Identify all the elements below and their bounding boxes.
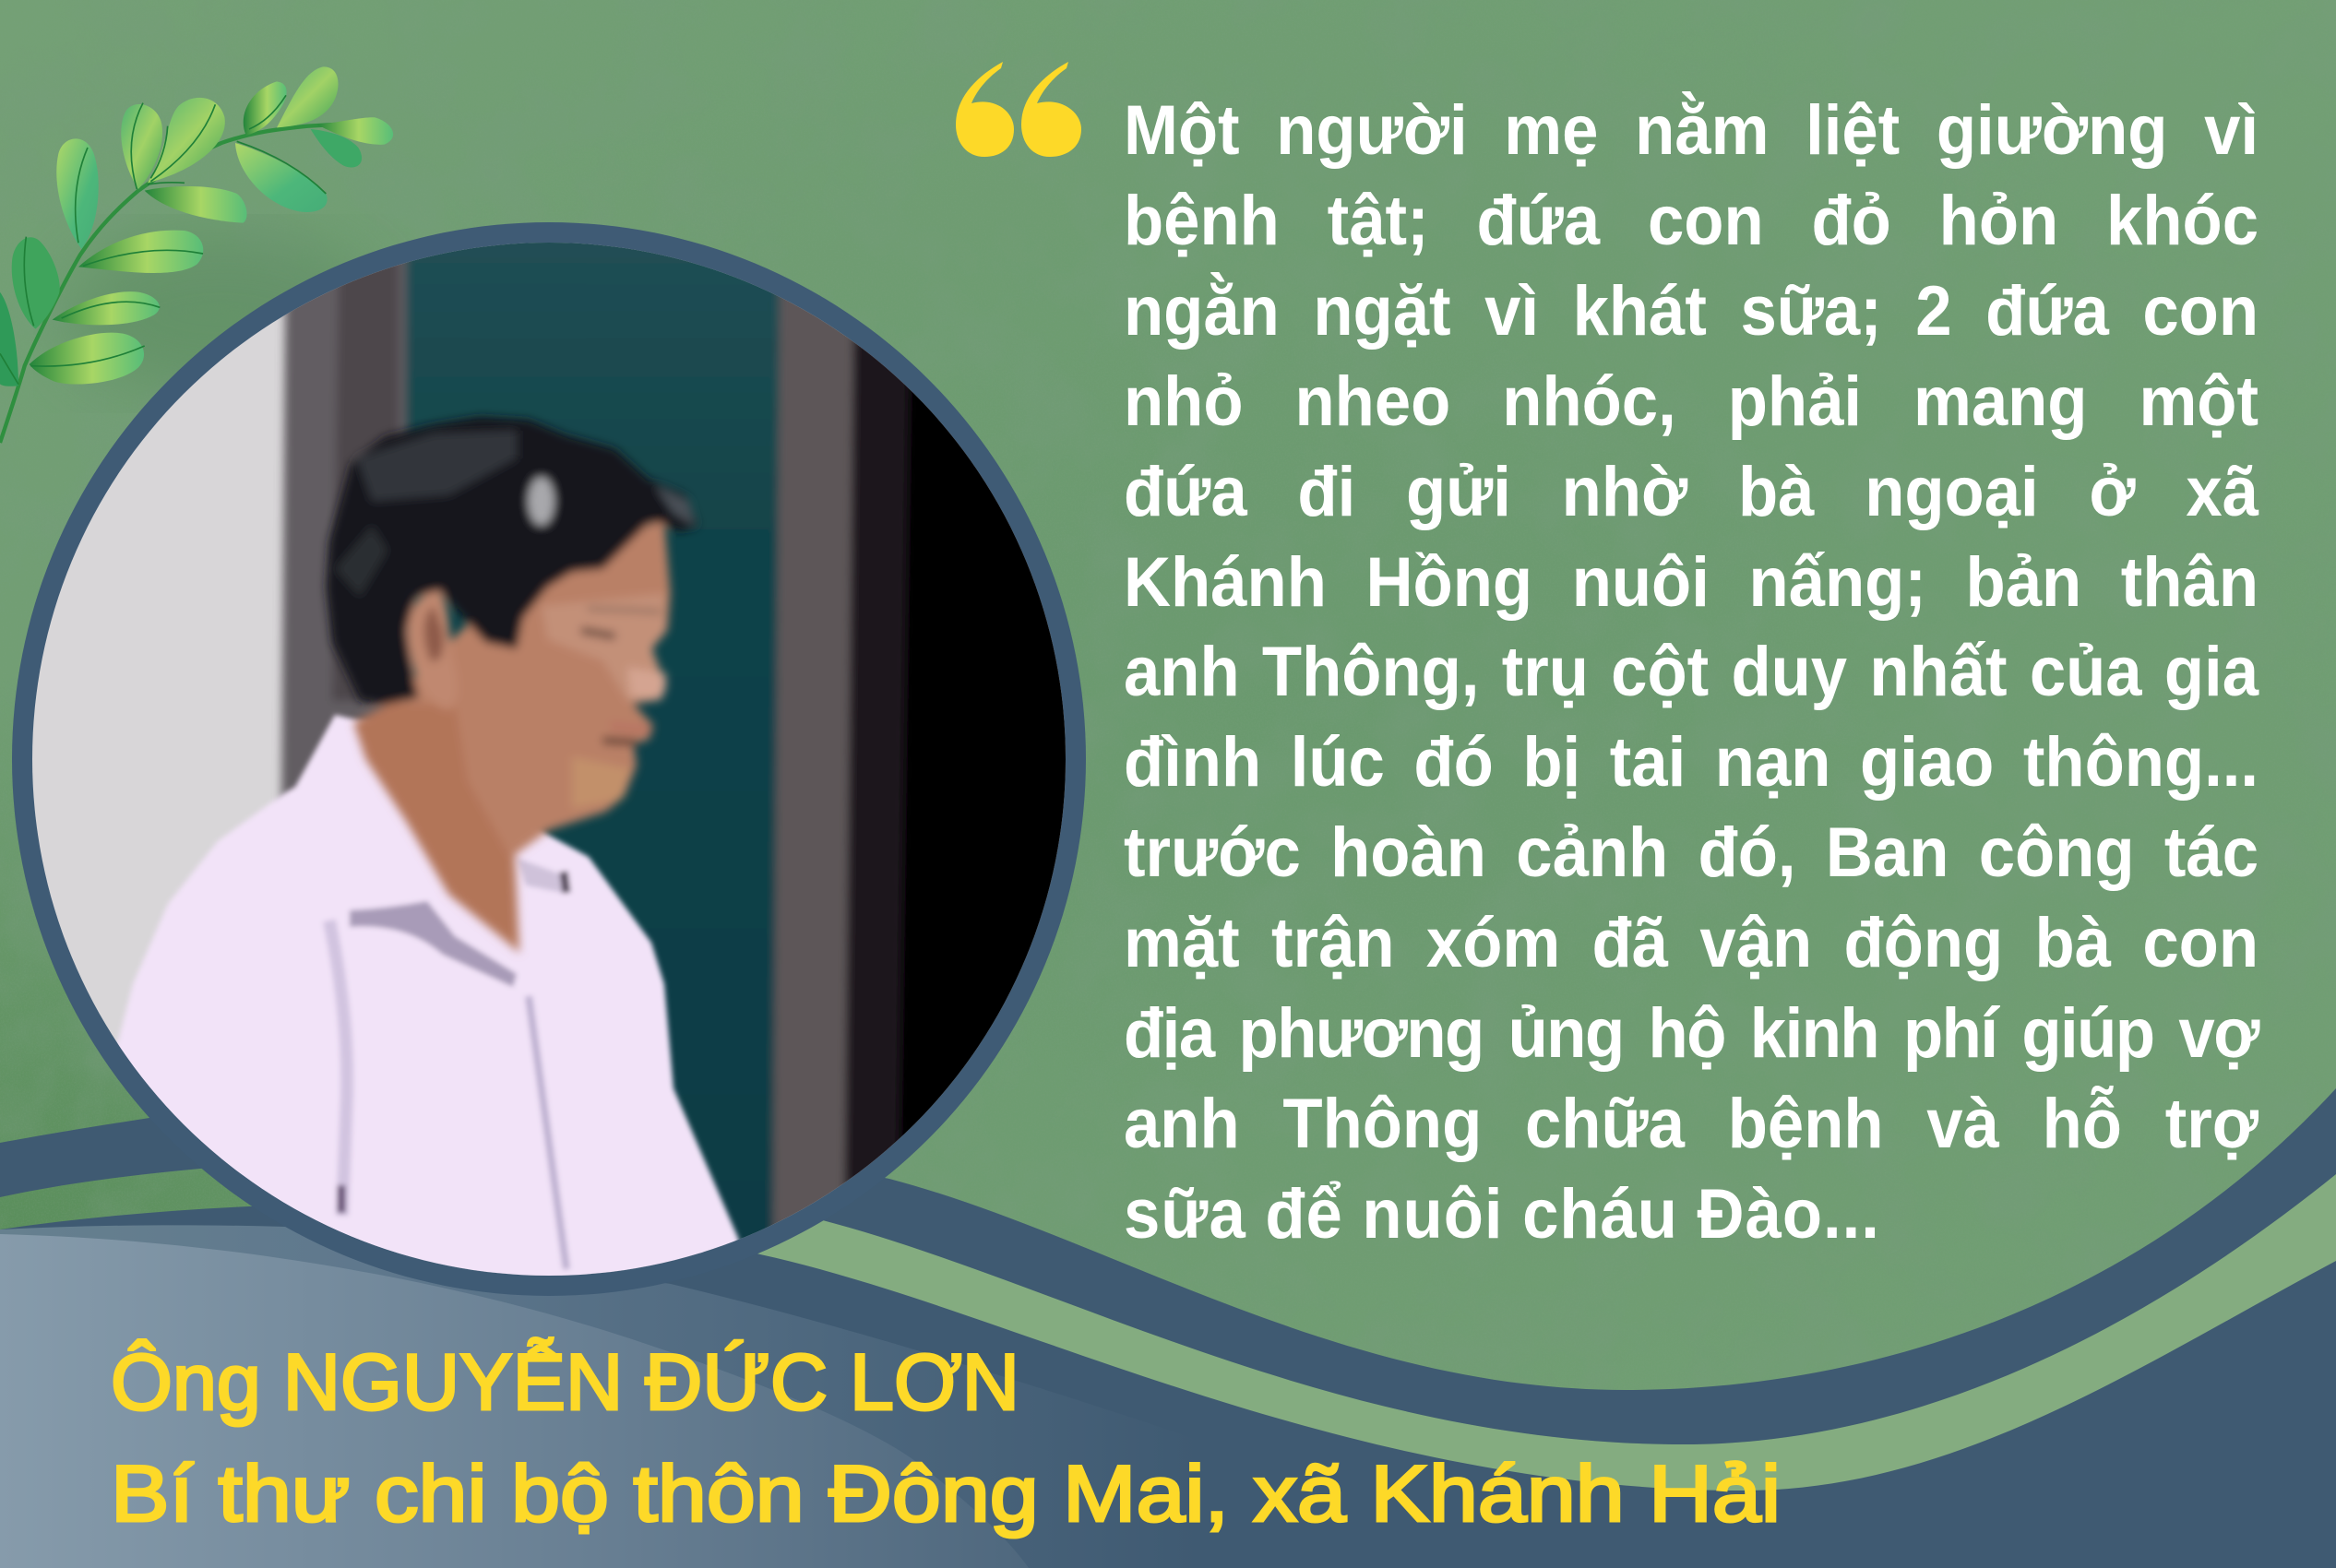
quote text [1124, 91, 2260, 1253]
upper wave band [0, 1088, 2336, 1444]
name and title caption: Bí thư chi bộ thôn Đông Mai, xã Khánh Hải [111, 1450, 1781, 1538]
name and title caption: Ông NGUYỄN ĐỨC LƠN [111, 1338, 1019, 1427]
quote text: nhỏ nheo nhóc, phải mang một [1124, 362, 2259, 441]
bottom dark wave [0, 1199, 2336, 1568]
quote text: Một người mẹ nằm liệt giường vì [1124, 91, 2259, 170]
hair [326, 417, 698, 704]
leaf sprig [0, 66, 393, 443]
quote text: mặt trận xóm đã vận động bà con [1124, 904, 2259, 982]
lower green stripe [646, 1174, 2336, 1568]
shirt [115, 712, 743, 1276]
bottom light panel [0, 1234, 1029, 1568]
quote text: trước hoàn cảnh đó, Ban công tác [1124, 814, 2259, 892]
quote text: anh Thông, trụ cột duy nhất của gia [1124, 633, 2259, 711]
quote text: địa phương ủng hộ kinh phí giúp vợ [1124, 994, 2259, 1073]
quote text: anh Thông chữa bệnh và hỗ trợ [1124, 1085, 2259, 1163]
opening quotation mark [956, 62, 1081, 157]
quote text: sữa để nuôi cháu Đào... [1124, 1175, 1880, 1253]
ear [408, 590, 458, 710]
portrait photo [32, 243, 1066, 1276]
quote text: ngằn ngặt vì khát sữa; 2 đứa con [1124, 272, 2259, 350]
quote text: đứa đi gửi nhờ bà ngoại ở xã [1124, 453, 2259, 531]
neck and face [353, 519, 671, 953]
name and title caption [111, 1338, 1781, 1538]
quote text: đình lúc đó bị tai nạn giao thông... [1124, 723, 2259, 802]
quote text: Khánh Hồng nuôi nấng; bản thân [1124, 543, 2259, 622]
portrait ring [12, 222, 1086, 1296]
quote text: bệnh tật; đứa con đỏ hỏn khóc [1124, 182, 2259, 260]
bottom mid panel [0, 1225, 1568, 1568]
